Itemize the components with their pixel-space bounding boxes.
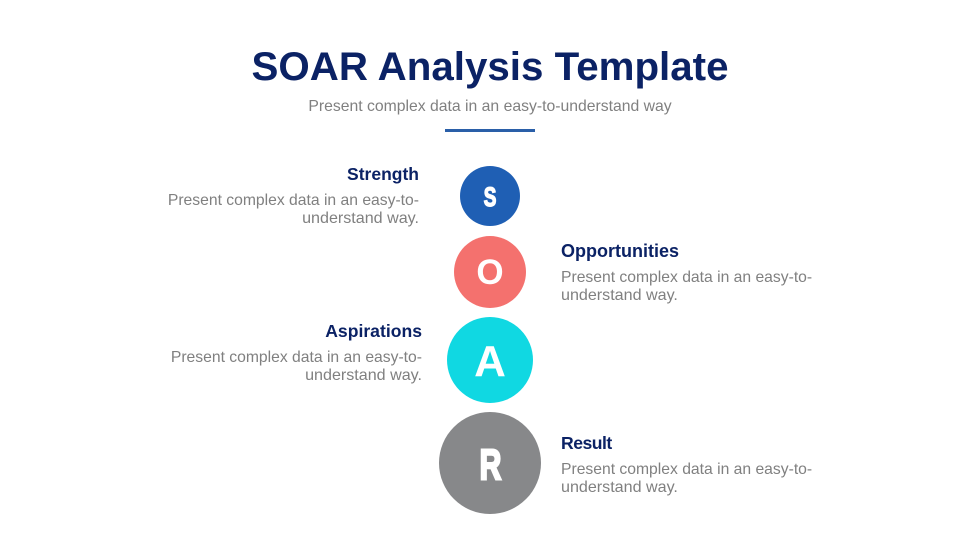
icon: S circle: S (484, 182, 496, 212)
text: aspirations description (171, 349, 422, 384)
panel: opportunities text (561, 241, 812, 304)
text: aspirations description: Present complex data in an easy-to- (171, 349, 422, 366)
panel: result text (561, 433, 812, 496)
icon: R circle (439, 412, 541, 514)
heading: opportunities: Opportunities (561, 241, 679, 261)
heading: aspirations: Aspirations (325, 321, 422, 341)
text: opportunities description: understand way. (561, 286, 678, 304)
text: aspirations description: understand way. (305, 366, 422, 384)
icon: R circle: R (480, 441, 502, 489)
icon: A circle (447, 317, 533, 403)
panel: aspirations text (171, 321, 422, 384)
text: strength description: understand way. (302, 208, 419, 226)
icon: O circle (454, 236, 526, 308)
heading: strength: Strength (347, 164, 419, 184)
text: result description: understand way. (561, 478, 678, 496)
icon: S circle (460, 166, 520, 226)
text: opportunities description (561, 269, 812, 304)
icon: A circle: A (474, 337, 506, 386)
title underline (445, 129, 535, 132)
text: result description (561, 461, 812, 496)
text: strength description (168, 192, 419, 226)
title: SOAR Analysis Template (252, 44, 728, 89)
heading: result: Result (561, 433, 612, 453)
text: result description: Present complex data in an easy-to- (561, 461, 812, 478)
panel: strength text (168, 164, 419, 226)
text: opportunities description: Present complex data in an easy-to- (561, 269, 812, 286)
subtitle: Present complex data in an easy-to-understand way (308, 98, 672, 115)
text: strength description: Present complex data in an easy-to- (168, 192, 419, 209)
icon: O circle: O (476, 253, 504, 292)
